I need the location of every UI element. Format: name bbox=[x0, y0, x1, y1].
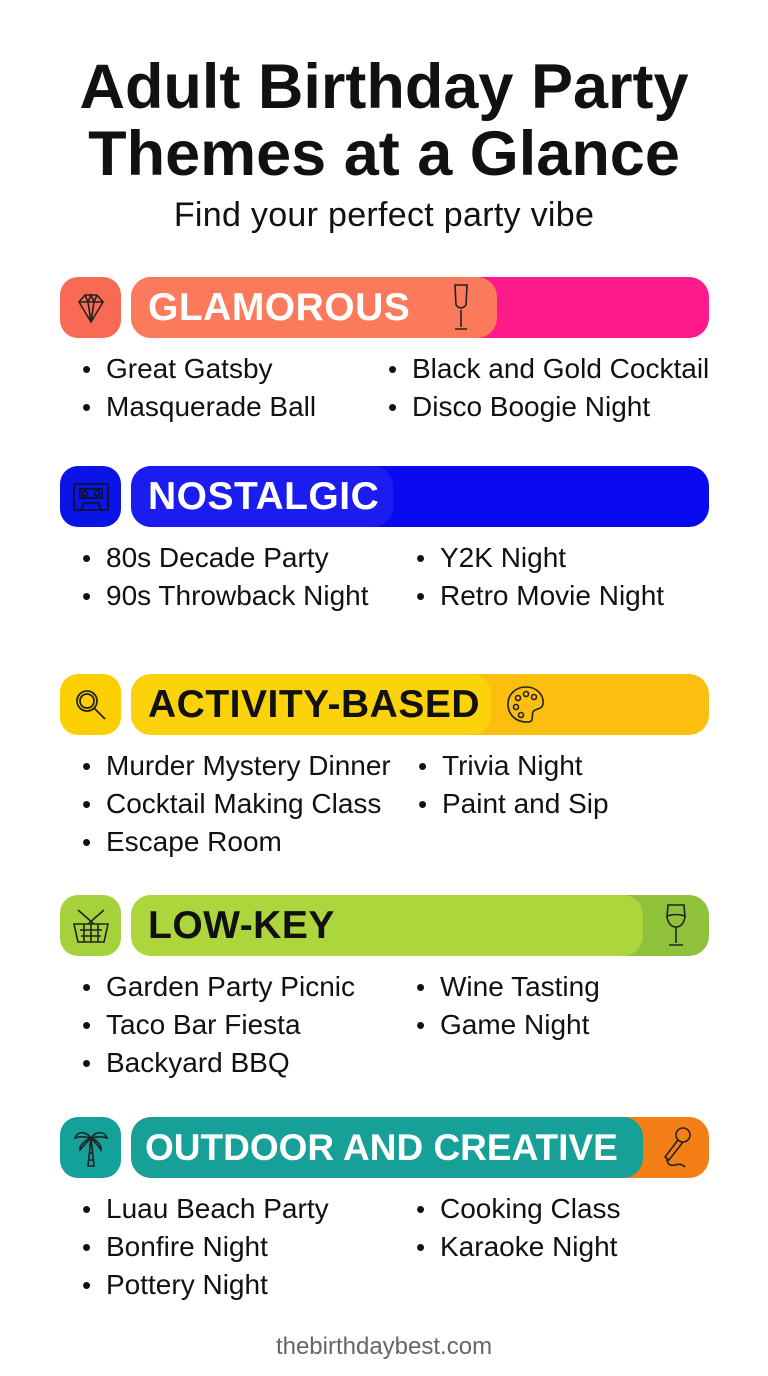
icon: diamond bbox=[60, 277, 121, 338]
list: low-key bbox=[83, 971, 600, 1078]
banner: activity-based bbox=[131, 674, 709, 735]
text: 80s Decade Party bbox=[106, 542, 329, 573]
list: nostalgic bbox=[83, 542, 664, 611]
title bbox=[79, 52, 689, 189]
text: Murder Mystery Dinner bbox=[106, 750, 391, 781]
text: Backyard BBQ bbox=[106, 1047, 290, 1078]
icon: microphone bbox=[664, 1127, 691, 1168]
banner: glamorous: GLAMOROUS bbox=[148, 286, 410, 328]
text: 90s Throwback Night bbox=[106, 580, 368, 611]
text: Luau Beach Party bbox=[106, 1193, 329, 1224]
text: Game Night bbox=[440, 1009, 589, 1040]
text: Bonfire Night bbox=[106, 1231, 268, 1262]
text: Disco Boogie Night bbox=[412, 391, 650, 422]
banner: nostalgic bbox=[131, 466, 709, 527]
text: Black and Gold Cocktail bbox=[412, 353, 709, 384]
text: Garden Party Picnic bbox=[106, 971, 355, 1002]
text: Taco Bar Fiesta bbox=[106, 1009, 301, 1040]
list: outdoor and creative bbox=[83, 1193, 621, 1300]
title: Themes at a Glance bbox=[88, 119, 680, 189]
text: Cooking Class bbox=[440, 1193, 621, 1224]
footer: thebirthdaybest.com bbox=[276, 1333, 492, 1360]
banner: low-key bbox=[131, 895, 709, 956]
text: Masquerade Ball bbox=[106, 391, 316, 422]
icon: palette bbox=[507, 686, 544, 723]
banner: activity-based: ACTIVITY-BASED bbox=[148, 682, 480, 726]
icon: magnifier bbox=[60, 674, 121, 735]
subtitle: Find your perfect party vibe bbox=[174, 196, 594, 234]
banner: outdoor and creative: OUTDOOR AND CREATIVE bbox=[145, 1126, 618, 1168]
banner: outdoor and creative bbox=[131, 1117, 709, 1178]
text: Paint and Sip bbox=[442, 788, 609, 819]
text: Retro Movie Night bbox=[440, 580, 664, 611]
icon: wine glass bbox=[666, 904, 686, 946]
text: Trivia Night bbox=[442, 750, 583, 781]
text: Great Gatsby bbox=[106, 353, 273, 384]
banner: low-key: LOW-KEY bbox=[148, 904, 335, 946]
banner: glamorous bbox=[131, 277, 709, 338]
icon: palm tree bbox=[60, 1117, 121, 1178]
icon: basket bbox=[60, 895, 121, 956]
title: Adult Birthday Party bbox=[79, 52, 689, 122]
list: activity-based bbox=[83, 750, 609, 857]
banner: nostalgic: NOSTALGIC bbox=[148, 474, 379, 518]
text: Escape Room bbox=[106, 826, 282, 857]
list: glamorous bbox=[83, 353, 709, 422]
text: Pottery Night bbox=[106, 1269, 268, 1300]
text: Y2K Night bbox=[440, 542, 566, 573]
icon: cassette bbox=[60, 466, 121, 527]
text: Karaoke Night bbox=[440, 1231, 617, 1262]
text: Cocktail Making Class bbox=[106, 788, 381, 819]
icon: champagne bbox=[454, 284, 468, 330]
text: Wine Tasting bbox=[440, 971, 600, 1002]
